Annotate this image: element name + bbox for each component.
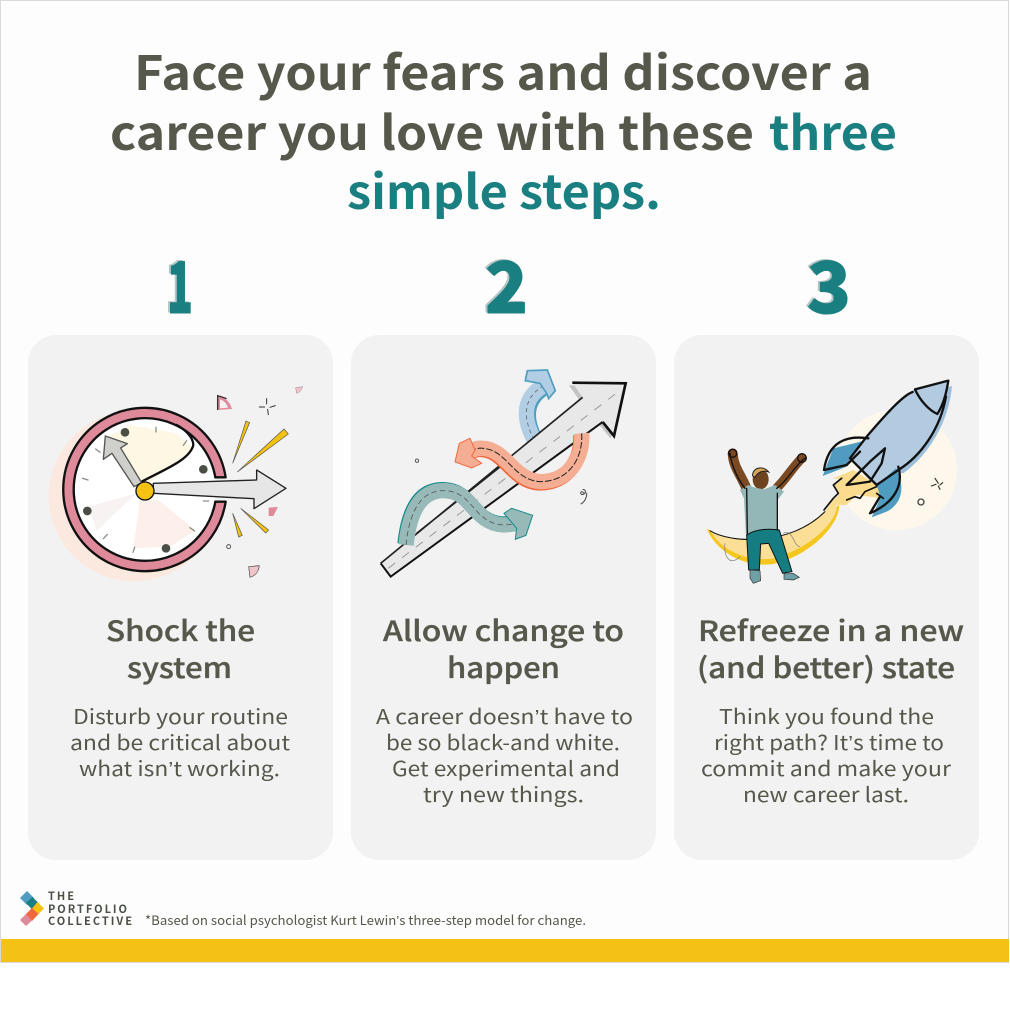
- body text: [376, 700, 633, 808]
- icon: road arrows: [381, 370, 626, 577]
- logo wordmark: COLLECTIVE: [48, 913, 132, 929]
- teal arrow: [405, 490, 533, 545]
- person: [729, 449, 806, 583]
- icon: clock: [49, 387, 303, 581]
- logo mark: [20, 891, 44, 926]
- blue arrow: [525, 370, 555, 441]
- heading: [106, 610, 255, 687]
- icon: person and rocket: [707, 381, 957, 583]
- heading: Shock the: [106, 610, 255, 650]
- step number 2: 2: [485, 232, 528, 334]
- coral arrow: [455, 433, 582, 483]
- footer band: [1, 939, 1009, 962]
- logo wordmark: THE: [48, 888, 74, 904]
- body text: new career last.: [743, 778, 909, 808]
- body text: Get experimental and: [392, 752, 620, 782]
- logo: [20, 888, 132, 929]
- heading: Refreeze in a new: [698, 610, 964, 650]
- body text: [70, 700, 290, 782]
- rocket: [823, 381, 952, 517]
- panel: step 2: [351, 335, 656, 860]
- heading: Allow change to: [383, 610, 624, 650]
- panel: step 3: [674, 335, 979, 860]
- body text: be so black-and white.: [386, 726, 620, 756]
- body text: and be critical about: [70, 726, 290, 756]
- body text: commit and make your: [701, 752, 951, 782]
- title: three: [769, 95, 897, 164]
- logo wordmark: [48, 888, 132, 929]
- heading: [697, 610, 964, 687]
- panel: step 1: [28, 335, 333, 860]
- heading: [383, 610, 624, 687]
- title: simple steps.: [347, 154, 661, 223]
- body text: [701, 700, 951, 808]
- heading: system: [127, 647, 232, 687]
- title: [110, 35, 897, 223]
- heading: happen: [447, 647, 560, 687]
- step number 3: 3: [807, 232, 851, 334]
- footnote: *Based on social psychologist Kurt Lewin ’s three-step model for change.: [145, 910, 586, 929]
- body text: try new things.: [423, 778, 584, 808]
- body text: Disturb your routine: [73, 700, 288, 730]
- crescent trail: [707, 470, 883, 565]
- body text: right path? It ’s time to: [714, 726, 944, 756]
- title: Face your fears and discover a: [134, 35, 872, 104]
- shards: [218, 387, 303, 577]
- step number 1: 1: [167, 232, 193, 334]
- body text: what isn ’t working.: [79, 752, 280, 782]
- title: career you love with these: [110, 95, 754, 164]
- logo wordmark: PORTFOLIO: [48, 901, 127, 917]
- body text: Think you found the: [719, 700, 934, 730]
- heading: (and better) state: [697, 647, 955, 687]
- body text: A career doesn ’t have to: [376, 700, 633, 730]
